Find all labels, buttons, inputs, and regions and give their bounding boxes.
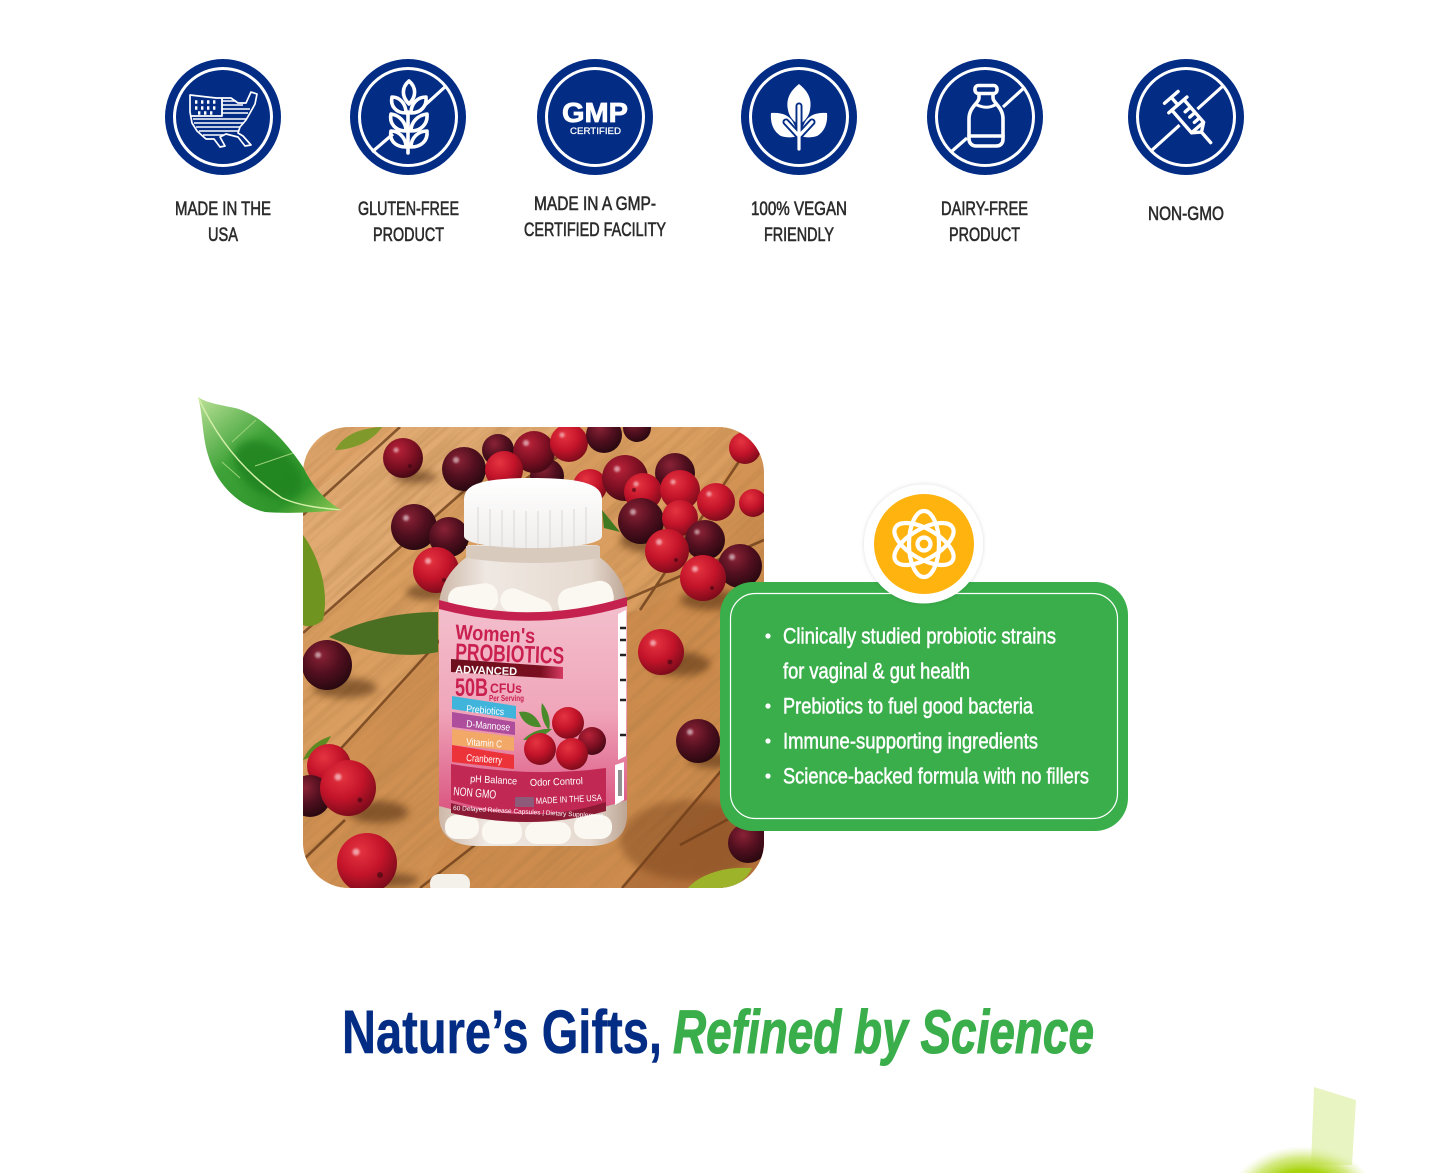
- icon: GMP wordmark: GMP: [562, 97, 628, 128]
- icon: wheat: [391, 81, 427, 153]
- label: [439, 601, 627, 818]
- wood table: [303, 427, 764, 888]
- label: gluten-free: [358, 198, 459, 246]
- bottle: [439, 478, 627, 846]
- heading: Nature’s Gifts,: [342, 998, 662, 1066]
- label footer: Odor Control: [530, 776, 583, 789]
- label: GMP facility: [524, 193, 666, 241]
- label: gluten-free: PRODUCT: [373, 224, 444, 246]
- icon: GMP wordmark: CERTIFIED: [570, 126, 622, 136]
- bottle glass: [439, 545, 627, 846]
- label: gluten-free: GLUTEN-FREE: [358, 198, 459, 220]
- label: vegan: 100% VEGAN: [751, 198, 847, 220]
- label: dairy-free: DAIRY-FREE: [941, 198, 1028, 220]
- background leaves: [303, 427, 752, 888]
- bullet list: Immune-supporting ingredients: [783, 728, 1038, 754]
- label: made in the USA: MADE IN THE: [175, 198, 271, 220]
- label cranberries: [519, 703, 606, 770]
- label footer: MADE IN THE USA: [536, 793, 602, 806]
- ingredient tags: Vitamin C: [466, 737, 502, 751]
- bullet list: Science-backed formula with no fillers: [783, 764, 1089, 788]
- 50B CFUs: [456, 678, 524, 702]
- label: non-GMO: NON-GMO: [1148, 203, 1224, 225]
- label: vegan: FRIENDLY: [764, 224, 834, 246]
- ingredient tags: [452, 696, 516, 769]
- label: dairy-free: [941, 198, 1028, 246]
- label text: brand heading: Women's: [455, 621, 536, 648]
- label: GMP facility: MADE IN A GMP-: [534, 193, 656, 215]
- corner fruit: [1220, 1087, 1385, 1173]
- label: dairy-free: PRODUCT: [949, 224, 1020, 246]
- capsules: [445, 578, 617, 844]
- cap: [464, 478, 602, 548]
- label: GMP facility: CERTIFIED FACILITY: [524, 219, 666, 241]
- label: vegan: [751, 198, 847, 246]
- icon: atom: [888, 511, 960, 577]
- 50B CFUs: Per Serving: [489, 694, 524, 703]
- label text: brand heading: PROBIOTICS: [455, 639, 565, 670]
- science icon: [864, 484, 983, 604]
- berry highlights: [315, 432, 735, 856]
- cranberries: [289, 414, 768, 894]
- label: made in the USA: [175, 198, 271, 246]
- ingredient tags: D-Mannose: [466, 719, 511, 734]
- badge: gluten-free: [350, 59, 466, 246]
- advanced band: ADVANCED: [455, 664, 517, 678]
- advanced band: [451, 659, 563, 679]
- ingredient tags: Cranberry: [466, 753, 502, 767]
- badge: dairy-free: [927, 59, 1043, 246]
- label footer: NON GMO: [453, 784, 497, 802]
- bullet list: for vaginal & gut health: [783, 658, 970, 684]
- product photo: [303, 427, 764, 888]
- badge: GMP certified: [524, 59, 666, 241]
- label footer: pH Balance: [470, 774, 518, 787]
- label: made in the USA: USA: [208, 224, 238, 246]
- bullet list: Prebiotics to fuel good bacteria: [783, 694, 1034, 718]
- benefits card: [720, 582, 1128, 831]
- icon: milk bottle: [969, 86, 1003, 146]
- icon: USA flag map: [190, 92, 257, 147]
- berry dimples: [358, 464, 714, 878]
- supplement facts: [615, 610, 626, 805]
- icon: leaves: [771, 84, 827, 149]
- icon: syringe: [1162, 89, 1220, 151]
- badges row: [165, 59, 1244, 246]
- heading: [342, 998, 1094, 1066]
- 50B CFUs: CFUs: [490, 680, 522, 696]
- ingredient tags: Prebiotics: [466, 704, 505, 718]
- berry shadows: [313, 471, 744, 887]
- bullet list: Clinically studied probiotic strains: [783, 624, 1056, 648]
- label footer: [451, 764, 606, 822]
- badge: made in the USA: [165, 59, 281, 246]
- label text: brand heading: [456, 624, 564, 664]
- 50B CFUs: 50B: [455, 674, 488, 702]
- badge: vegan: [741, 59, 857, 246]
- basil leaf: [195, 395, 345, 515]
- bullet list: [765, 624, 1089, 788]
- label footer: 60 Delayed Release Capsules | Dietary Supplement: [453, 805, 603, 820]
- badge: non-GMO: [1128, 59, 1244, 225]
- heading: Refined by Science: [673, 998, 1094, 1066]
